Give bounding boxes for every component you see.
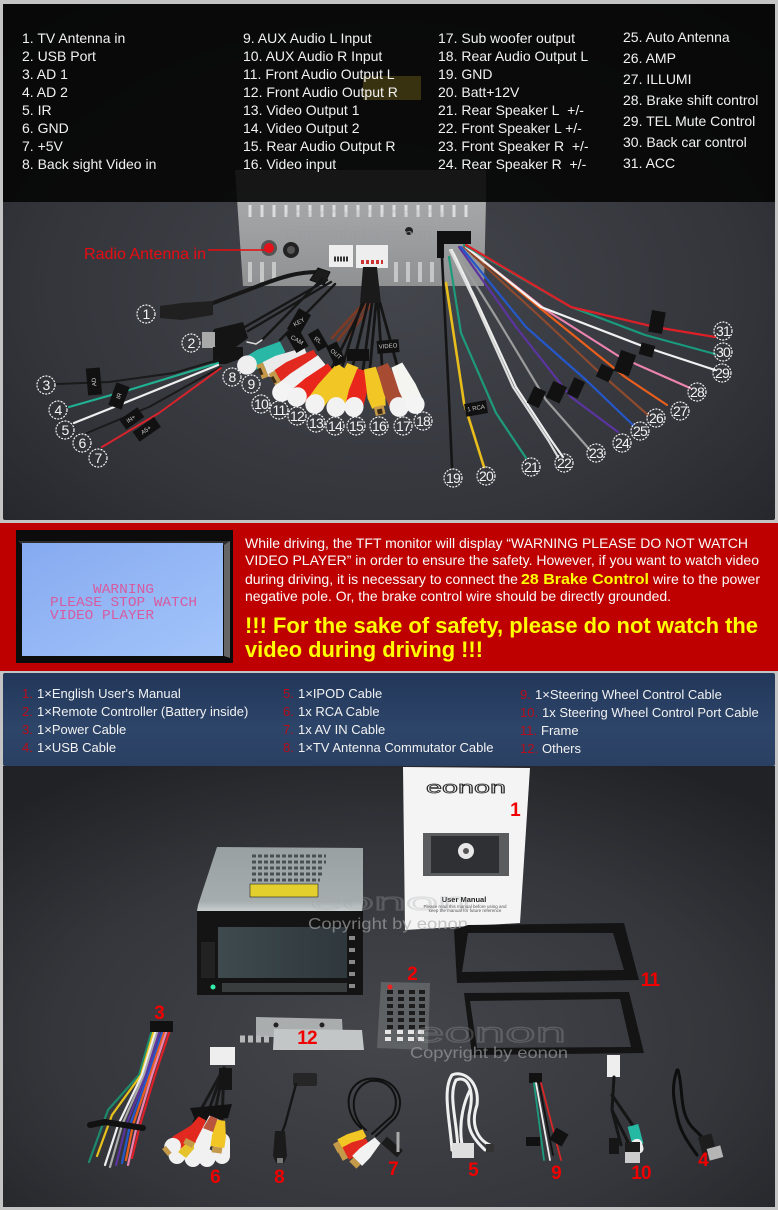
pin list: column 4: 28. Brake shift control xyxy=(623,92,758,108)
number callouts: wires: 27 xyxy=(673,403,688,419)
pin list: column 4: 27. ILLUMI xyxy=(623,71,691,87)
package list: column 3 xyxy=(520,687,759,756)
pin list: column 3: 21. Rear Speaker L +/- xyxy=(438,102,584,118)
safety warning headline: !!! For the sake of safety, please do not watch the xyxy=(245,613,758,638)
part number labels: 8 xyxy=(274,1167,284,1188)
pin list: column 1 xyxy=(22,30,156,172)
wire flag tags: AD xyxy=(92,377,98,386)
warning explanation text: VIDEO PLAYER” in order to ensure the safety. However, if you want to watch video xyxy=(245,552,759,568)
package list: column 1: 1. xyxy=(22,686,33,701)
number callouts: wires: 22 xyxy=(557,455,572,471)
package list: column 2: 1×TV Antenna Commutator Cable xyxy=(298,740,493,755)
item: TV antenna adapter xyxy=(273,1073,317,1163)
wire flag tags: KEY xyxy=(293,317,306,328)
warning explanation text: wire to the power xyxy=(652,571,760,587)
pin list: column 2: 14. Video Output 2 xyxy=(243,120,360,136)
pin list: column 3 xyxy=(438,30,589,172)
pin list: column 2: 12. Front Audio Output R xyxy=(243,84,398,100)
number callouts: wires: 26 xyxy=(649,410,664,426)
part number labels xyxy=(154,800,709,1188)
package list: column 2 xyxy=(283,686,493,755)
item: steering wheel cable xyxy=(526,1073,569,1160)
package list: column 3: 1x Steering Wheel Control Port Cable xyxy=(542,705,759,720)
package list: column 3: 12. xyxy=(520,741,538,756)
warning screen photo: WARNING xyxy=(93,582,154,598)
wire flag tags: A5+ xyxy=(140,425,153,436)
wire flag tags: RL xyxy=(313,336,323,346)
package list: column 2: 7. xyxy=(283,722,294,737)
wire flag tags: 1 RCA xyxy=(467,404,485,413)
pin list: column 1: 4. AD 2 xyxy=(22,84,68,100)
pin list: column 1: 3. AD 1 xyxy=(22,66,68,82)
watermark: upper xyxy=(308,889,470,933)
number callouts: wires: 7 xyxy=(94,450,102,466)
pin list: column 2: 13. Video Output 1 xyxy=(243,102,360,118)
number callouts: wires: 19 xyxy=(446,470,461,486)
pin list: column 3: 24. Rear Speaker R +/- xyxy=(438,156,587,172)
item: head unit xyxy=(197,847,363,995)
number callouts: wires: 12 xyxy=(290,408,305,424)
pin list: column 1: 1. TV Antenna in xyxy=(22,30,125,46)
package list: column 3: 1×Steering Wheel Control Cable xyxy=(535,687,722,702)
item: frame 11 xyxy=(454,923,639,983)
number callouts: wires xyxy=(37,305,732,487)
watermark: lower: eonon xyxy=(414,1017,566,1048)
pin list: column 2: 15. Rear Audio Output R xyxy=(243,138,396,154)
pin list: column 3: 17. Sub woofer output xyxy=(438,30,575,46)
item: user manual: eonon xyxy=(426,778,506,797)
wire flag tags: OUT xyxy=(329,348,342,361)
package list: column 1: 4. xyxy=(22,740,33,755)
device watermark xyxy=(285,204,445,243)
number callouts: wires: 10 xyxy=(254,396,269,412)
pin list: column 1: 8. Back sight Video in xyxy=(22,156,156,172)
item: AV IN cable xyxy=(332,1079,400,1170)
pin list: column 2: 11. Front Audio Output L xyxy=(243,66,395,82)
package list: column 3: 10. xyxy=(520,705,538,720)
watermark: upper: eonon xyxy=(310,889,470,916)
pin list: column 4: 31. ACC xyxy=(623,155,675,171)
part number labels: 1 xyxy=(510,800,521,821)
pin list: column 2 xyxy=(243,30,398,172)
warning explanation text xyxy=(245,535,760,604)
number callouts: wires: 6 xyxy=(78,435,86,451)
part number labels: 4 xyxy=(698,1150,709,1171)
pin list: column 4: 30. Back car control xyxy=(623,134,747,150)
package list: column 1: 3. xyxy=(22,722,33,737)
item: brackets and screws xyxy=(240,1017,364,1050)
device watermark: eonon xyxy=(285,204,445,227)
device rear plate xyxy=(235,170,486,286)
pin list: column 4: 26. AMP xyxy=(623,50,676,66)
part number labels: 7 xyxy=(388,1159,398,1180)
part number labels: 3 xyxy=(154,1003,164,1024)
pin list: column 1: 2. USB Port xyxy=(22,48,96,64)
number callouts: wires: 2 xyxy=(188,335,196,351)
number callouts: wires: 4 xyxy=(54,402,62,418)
warning screen photo: VIDEO PLAYER xyxy=(50,608,155,624)
number callouts: wires: 9 xyxy=(248,376,256,392)
item: iPod cable xyxy=(447,1074,494,1158)
number callouts: wires: 14 xyxy=(328,418,343,434)
number callouts: wires: 20 xyxy=(479,468,494,484)
number callouts: wires: 17 xyxy=(396,418,411,434)
item: frame lower xyxy=(464,992,644,1055)
warning explanation text: 28 Brake Control xyxy=(521,571,649,588)
panel: package contents photo xyxy=(3,766,775,1207)
item: steering wheel port cable xyxy=(607,1055,645,1163)
number callouts: wires: 13 xyxy=(309,415,324,431)
warning screen photo xyxy=(16,530,233,663)
package list: column 2: 1x RCA Cable xyxy=(298,704,380,719)
overlay: pin list background xyxy=(3,4,775,202)
package list: column 1: 1×Remote Controller (Battery inside) xyxy=(37,704,248,719)
package list: column 2: 5. xyxy=(283,686,294,701)
watermark: lower xyxy=(410,1017,568,1062)
item: USB cable xyxy=(673,1070,723,1161)
package list: column 3: 9. xyxy=(520,687,531,702)
number callouts: wires: 15 xyxy=(349,418,364,434)
pin list: column 2: 9. AUX Audio L Input xyxy=(243,30,372,46)
item: user manual: keep the manual for future reference xyxy=(429,908,502,913)
number callouts: wires: 24 xyxy=(615,435,630,451)
package list: column 1: 1×USB Cable xyxy=(37,740,116,755)
number callouts: wires: 3 xyxy=(42,377,50,393)
number callouts: wires: 25 xyxy=(633,423,648,439)
pin list: column 3: 18. Rear Audio Output L xyxy=(438,48,588,64)
package list: column 2: 8. xyxy=(283,740,294,755)
number callouts: wires: 23 xyxy=(589,445,604,461)
pin list: column 4 xyxy=(623,29,758,171)
dim device label in overlay xyxy=(363,76,421,100)
part number labels: 12 xyxy=(297,1028,317,1049)
item: remote control xyxy=(377,982,430,1050)
part number labels: 10 xyxy=(631,1163,651,1184)
pin list: column 1: 6. GND xyxy=(22,120,69,136)
package list: column 1: 1×English User's Manual xyxy=(37,686,181,701)
panel: package list xyxy=(3,673,775,766)
number callouts: wires: 8 xyxy=(228,369,236,385)
pin list: column 3: 22. Front Speaker L +/- xyxy=(438,120,582,136)
number callouts: wires: 31 xyxy=(716,323,731,339)
wire flag tags xyxy=(86,308,666,442)
wire flag tags: CAM xyxy=(289,335,304,347)
number callouts: wires: 5 xyxy=(62,422,70,438)
number callouts: wires: 28 xyxy=(690,384,705,400)
warning screen photo: PLEASE STOP WATCH xyxy=(50,595,197,611)
item: user manual: User Manual xyxy=(442,895,486,904)
warning explanation text: While driving, the TFT monitor will display “WARNING PLEASE DO NOT WATCH xyxy=(245,535,748,551)
item: user manual: Please read this manual before using and xyxy=(423,904,507,909)
package list: column 1 xyxy=(22,686,248,755)
panel: driving warning xyxy=(0,523,778,671)
package list: column 1: 2. xyxy=(22,704,33,719)
pin list: column 1: 7. +5V xyxy=(22,138,64,154)
sleeve and RCA fan-out xyxy=(332,267,397,370)
item: power cable xyxy=(89,1021,173,1167)
RCA plugs xyxy=(234,338,428,420)
safety warning headline: video during driving !!! xyxy=(245,637,483,662)
package list: column 2: 1×IPOD Cable xyxy=(298,686,382,701)
pin list: column 3: 23. Front Speaker R +/- xyxy=(438,138,589,154)
part number labels: 9 xyxy=(551,1163,561,1184)
device watermark: Copyright by eonon xyxy=(285,226,432,243)
watermark: lower: Copyright by eonon xyxy=(410,1045,568,1062)
package list: column 1: 1×Power Cable xyxy=(37,722,126,737)
pin list: column 2: 10. AUX Audio R Input xyxy=(243,48,382,64)
pin list: column 3: 20. Batt+12V xyxy=(438,84,520,100)
item: RCA cable xyxy=(160,1047,235,1167)
number callouts: wires: 11 xyxy=(273,402,286,418)
panel: wiring diagram xyxy=(3,4,775,520)
pin list: column 2: 16. Video input xyxy=(243,156,336,172)
safety warning headline xyxy=(245,613,758,662)
right wire harness xyxy=(437,231,715,467)
number callouts: wires: 29 xyxy=(715,365,730,381)
wires: left breakout xyxy=(57,268,335,447)
number callouts: wires: 21 xyxy=(524,459,539,475)
number callouts: wires: 16 xyxy=(372,418,387,434)
pin list: column 4: 29. TEL Mute Control xyxy=(623,113,755,129)
pin list: column 1: 5. IR xyxy=(22,102,52,118)
number callouts: wires: 1 xyxy=(142,306,150,322)
watermark: upper: Copyright by eonon xyxy=(308,916,468,933)
wire flag tags: IN+ xyxy=(126,414,138,425)
number callouts: wires: 18 xyxy=(416,413,431,429)
part number labels: 11 xyxy=(641,970,660,991)
package list: column 3: Frame xyxy=(541,723,579,738)
label: radio antenna: Radio Antenna in xyxy=(84,246,206,263)
part number labels: 6 xyxy=(210,1167,220,1188)
pin list: column 4: 25. Auto Antenna xyxy=(623,29,730,45)
package list: column 2: 6. xyxy=(283,704,294,719)
warning explanation text: during driving, it is necessary to connect the xyxy=(245,571,518,587)
part number labels: 5 xyxy=(468,1160,479,1181)
pin list: column 3: 19. GND xyxy=(438,66,492,82)
warning explanation text: negative pole. Or, the brake control wire should be directly grounded. xyxy=(245,588,671,604)
part number labels: 2 xyxy=(407,964,417,985)
package list: column 3: Others xyxy=(542,741,582,756)
package list: column 3: 11. xyxy=(520,723,537,738)
wire flag tags: VIDEO xyxy=(379,343,398,351)
number callouts: wires: 30 xyxy=(716,344,731,360)
package list: column 2: 1x AV IN Cable xyxy=(298,722,385,737)
wire flag tags: IR xyxy=(116,392,124,400)
item: user manual xyxy=(403,767,530,930)
